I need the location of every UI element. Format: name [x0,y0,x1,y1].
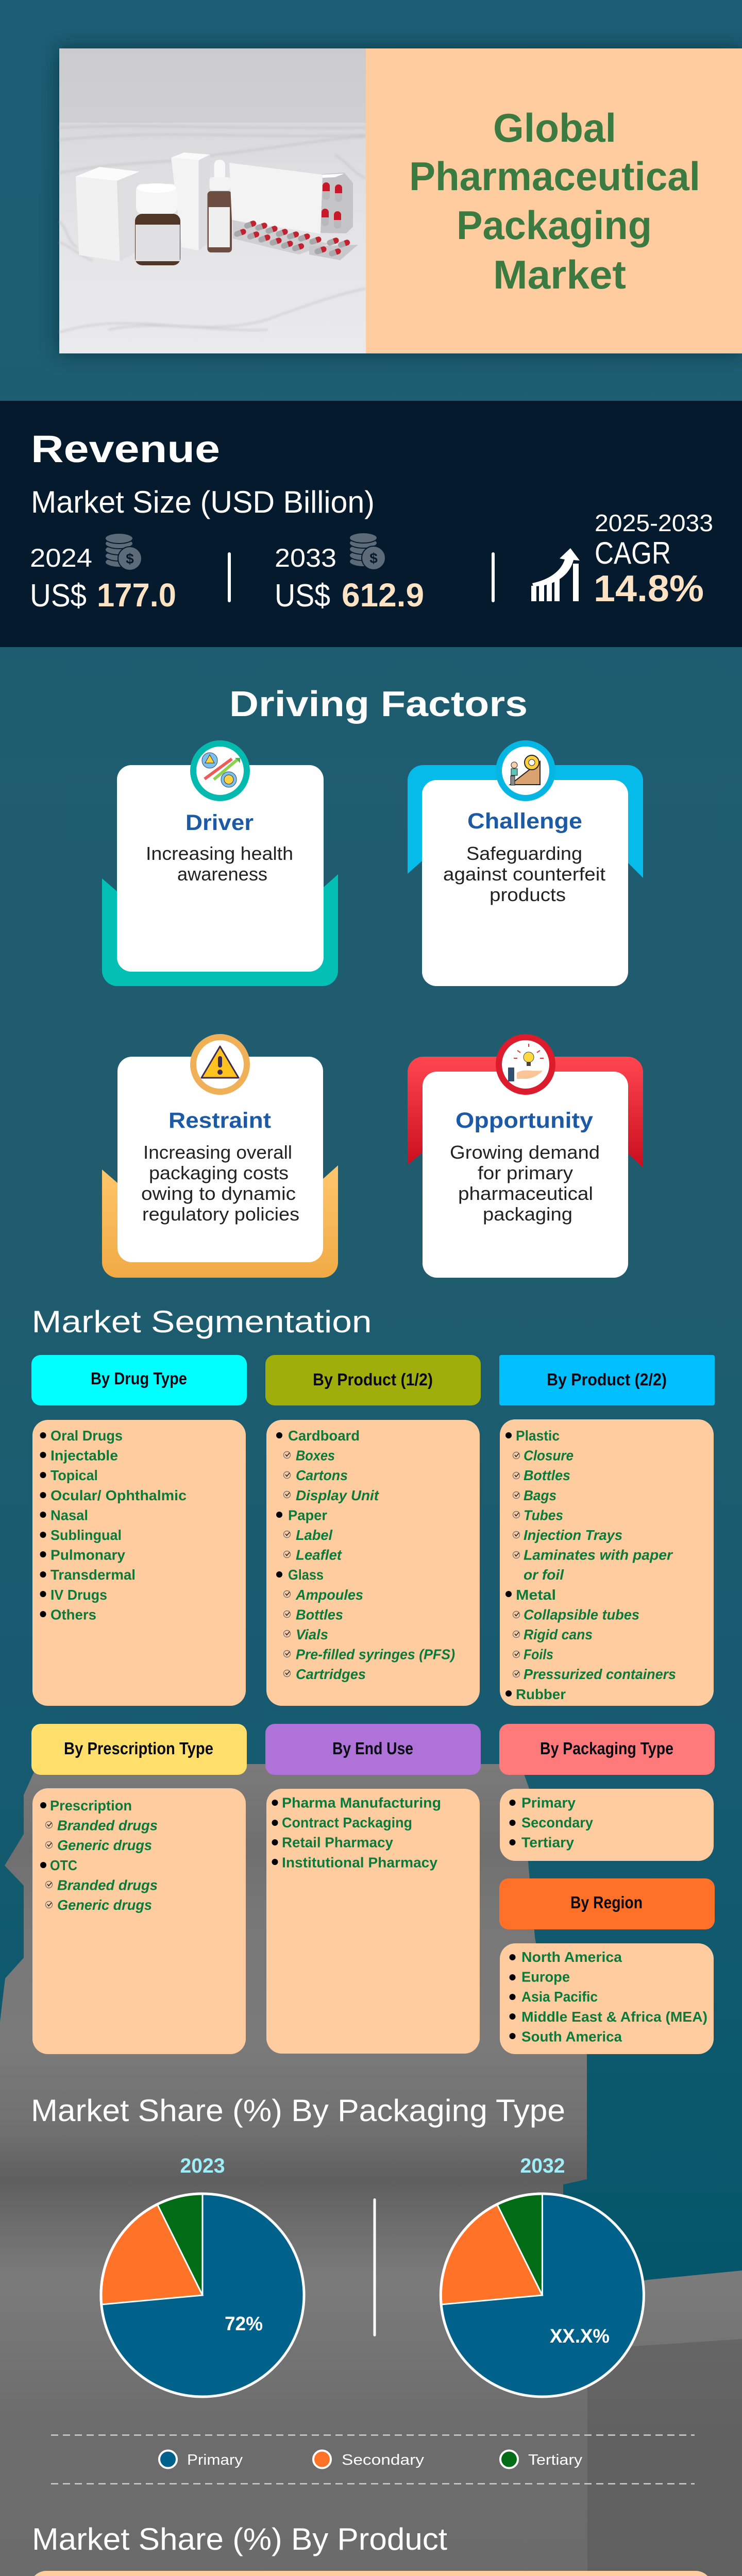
icon: challenge [496,740,555,801]
segment: by drug type: Transdermal [50,1567,136,1583]
title [409,105,700,297]
segment: by drug type: Topical [50,1467,98,1483]
segment: by product 1 of 2: Label [296,1527,333,1543]
segment: by product 1 of 2: Leaflet [296,1547,343,1563]
segment: by product 1 of 2: Ampoules [295,1587,363,1603]
segment: by product 2 of 2: Rigid cans [524,1626,593,1642]
segment: by prescription type: OTC [50,1857,77,1873]
card text: against counterfeit [443,863,605,885]
segment: by product 1 of 2: Boxes [296,1448,335,1464]
icon: driver [190,740,250,801]
card text [443,843,605,905]
segment: by packaging type: Tertiary [521,1835,574,1851]
card text: products [490,884,566,905]
title panel [366,48,742,353]
segment: by product 1 of 2: Display Unit [296,1487,380,1503]
pie chart: 2023: 2023 [180,2155,225,2177]
segment: by drug type: Others [50,1606,96,1622]
card: restraint [102,1034,338,1278]
segment: by region: Middle East & Africa (MEA) [521,2009,707,2025]
segment: by product 2 of 2: Foils [524,1647,553,1663]
segment: by drug type: Injectable [50,1448,118,1464]
segment: by product 2 of 2: By Product (2/2) [547,1370,667,1389]
segment: by end use [265,1724,481,2054]
icon: coins: $ [369,550,378,566]
pie chart: 2032: 2032 [520,2155,565,2177]
segment: by end use: By End Use [332,1739,413,1758]
segment: by product 1 of 2: Paper [288,1507,327,1523]
card text [450,1142,600,1225]
segment: by product 2 of 2: Bottles [524,1467,570,1483]
segment: by product 2 of 2: Closure [524,1448,574,1464]
card text: Increasing overall [143,1142,292,1163]
segment: by prescription type: Generic drugs [57,1837,152,1853]
segment: by end use: Institutional Pharmacy [282,1854,437,1870]
pie chart: 2023: 72% [225,2313,263,2335]
card: driver [102,740,338,986]
market size label: Market Size (USD Billion) [31,485,375,519]
icon: growth arrow [531,548,580,601]
heading: market share by product: Market Share (%) By Product [32,2522,447,2556]
segment: by product 1 of 2: Bottles [296,1606,343,1622]
segment: by product 2 of 2: or foil [524,1567,564,1583]
segment: by region: By Region [570,1893,643,1912]
segment: by product 1 of 2: Glass [288,1567,324,1583]
segment: by product 2 of 2 [499,1355,715,1706]
segment: by drug type: Pulmonary [50,1547,125,1563]
segment: by product 2 of 2: Metal [516,1587,556,1603]
card text: Increasing health [146,843,293,864]
card text: Safeguarding [466,843,582,864]
segment: by product 1 of 2: Cartons [296,1467,348,1483]
segment: by product 1 of 2: Pre-filled syringes (PFS) [296,1647,455,1663]
segment: by prescription type [31,1724,247,2054]
segment: by region: South America [521,2028,622,2044]
segment: by product 1 of 2 [265,1355,481,1706]
stat: 2024 revenue: 2024 [30,544,92,572]
icon: coins [349,533,385,570]
segment: by drug type: Ocular/ Ophthalmic [50,1487,187,1503]
segment: by product 2 of 2: Injection Trays [524,1527,622,1543]
segment: by region [499,1878,715,2054]
segment: by end use: Contract Packaging [282,1815,412,1831]
stat: 2033 revenue [275,533,424,614]
segment: by region: North America [521,1949,622,1965]
pie chart: 2032 [440,2155,644,2397]
heading: driving factors: Driving Factors [229,684,528,724]
segment: by packaging type [499,1724,715,1861]
card text: pharmaceutical [458,1183,593,1204]
revenue band [0,401,742,647]
stat: 2024 revenue: 177.0 [97,577,176,614]
segment: by region: Asia Pacific [521,1989,598,2005]
card: opportunity [408,1034,643,1278]
stat: CAGR: 2025-2033 [595,510,713,536]
card text: regulatory policies [142,1204,299,1225]
stat: CAGR [594,510,713,609]
icon: coins: $ [126,551,134,567]
segment: by drug type: Nasal [50,1507,88,1523]
segment: by product 2 of 2: Pressurized containers [524,1666,676,1682]
hero photo: medicine packaging on marble [59,48,366,353]
panel: market share by product [30,2571,712,2576]
segment: by prescription type: Branded drugs [57,1818,158,1834]
segment: by product 2 of 2: Tubes [524,1507,563,1523]
segment: by region: Europe [521,1969,570,1985]
card heading: Driver [185,810,254,835]
stat: 2033 revenue: 2033 [275,544,336,572]
icon: coins [105,533,142,570]
segment: by product 1 of 2: Vials [296,1626,328,1642]
icon: warning [190,1034,250,1095]
title: Global [493,105,616,150]
segment: by product 2 of 2: Plastic [516,1428,560,1444]
stat: 2024 revenue [30,533,176,614]
segment: by product 1 of 2: Cardboard [288,1428,360,1444]
card heading: Restraint [168,1108,271,1133]
card text: for primary [478,1162,573,1183]
card text: Growing demand [450,1142,600,1163]
segment: by end use: Pharma Manufacturing [282,1795,441,1810]
card heading: Challenge [467,809,582,834]
card text [146,843,293,885]
heading: market segmentation: Market Segmentation [32,1304,372,1339]
segment: by packaging type: Primary [521,1795,576,1810]
heading: revenue: Revenue [31,428,220,470]
segment: by product 2 of 2: Bags [524,1487,556,1503]
segment: by drug type [31,1355,247,1706]
title: Market [493,252,626,297]
segment: by end use: Retail Pharmacy [282,1835,393,1851]
segment: by drug type: Oral Drugs [50,1428,123,1444]
title: Packaging [457,202,652,248]
card text: packaging [483,1204,572,1225]
segment: by prescription type: Prescription [50,1798,132,1814]
segment: by prescription type: By Prescription Type [64,1739,213,1758]
card text: owing to dynamic [141,1183,296,1204]
title: Pharmaceutical [409,154,700,199]
stat: 2033 revenue: 612.9 [342,577,424,614]
legend: packaging type: Secondary [342,2452,425,2468]
legend: packaging type [51,2435,695,2484]
segment: by prescription type: Branded drugs [57,1877,158,1893]
segment: by drug type: IV Drugs [50,1587,107,1603]
card heading: Opportunity [456,1108,593,1133]
legend: packaging type: Primary [187,2452,243,2468]
segment: by product 2 of 2: Rubber [516,1686,566,1702]
stat: 2033 revenue: US$ [275,578,330,614]
segment: by packaging type: Secondary [521,1815,593,1831]
hero banner [59,48,742,353]
stat: 2024 revenue: US$ [30,578,87,614]
icon: opportunity [496,1034,555,1095]
pie chart: 2032: XX.X% [550,2326,610,2347]
segment: by drug type: By Drug Type [91,1369,187,1388]
segment: by prescription type: Generic drugs [57,1897,152,1913]
segment: by packaging type: By Packaging Type [540,1739,673,1758]
segment: by product 2 of 2: Collapsible tubes [524,1606,639,1622]
segment: by product 1 of 2: Cartridges [296,1666,366,1682]
card text: packaging costs [149,1162,289,1183]
card text [141,1142,299,1225]
pie chart: 2023 [100,2155,304,2397]
legend: packaging type: Tertiary [528,2452,583,2468]
segment: by drug type: Sublingual [50,1527,122,1543]
heading: market share by packaging type: Market Share (%) By Packaging Type [31,2093,565,2128]
segment: by product 1 of 2: By Product (1/2) [313,1370,433,1389]
stat: CAGR: CAGR [595,536,671,570]
stat: CAGR: 14.8% [594,568,704,609]
segment: by product 2 of 2: Laminates with paper [524,1547,673,1563]
card: challenge [408,740,643,986]
card text: awareness [177,863,267,885]
